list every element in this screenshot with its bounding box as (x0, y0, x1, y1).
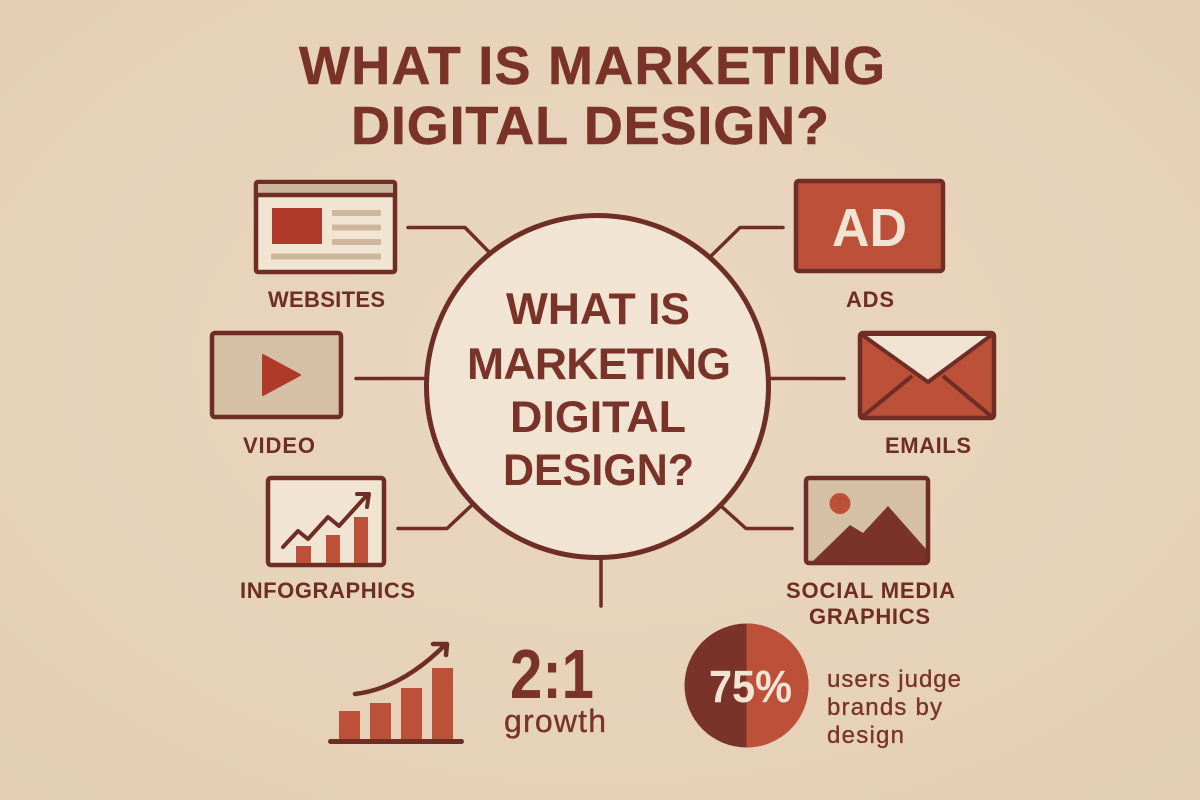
75% stat (684, 624, 961, 749)
central circle: DIGITAL (510, 393, 686, 442)
icon: ad banner: AD (832, 198, 907, 258)
label: WEBSITES (268, 287, 385, 312)
video item (212, 333, 341, 458)
icon: image (806, 478, 928, 563)
central circle: WHAT IS (506, 285, 690, 334)
central circle: DESIGN? (503, 446, 694, 495)
stat value: 2:1 (510, 635, 594, 713)
icon: envelope (860, 333, 994, 418)
icon: video player (212, 333, 341, 417)
label (786, 578, 955, 629)
title: DIGITAL DESIGN? (351, 96, 829, 156)
growth stat (328, 635, 606, 744)
social media graphics item (786, 478, 955, 629)
label: GRAPHICS (809, 604, 930, 629)
title: WHAT IS MARKETING (299, 36, 885, 96)
icon: browser window (256, 182, 395, 272)
stat description: users judge (827, 666, 961, 693)
emails item (860, 333, 994, 458)
pie chart (684, 624, 808, 748)
ads item (796, 181, 943, 312)
label: EMAILS (885, 433, 971, 458)
infographics item (240, 478, 415, 603)
websites item (256, 182, 395, 312)
central circle: MARKETING (467, 340, 731, 389)
icon: chart panel (268, 478, 384, 565)
central circle (426, 216, 768, 558)
stat description (827, 666, 961, 749)
label: VIDEO (243, 433, 315, 458)
icon: growth bars (328, 644, 464, 744)
stat label: growth (504, 703, 606, 739)
title (299, 36, 885, 156)
label: INFOGRAPHICS (240, 578, 415, 603)
stat description: brands by (827, 694, 942, 721)
connector lines (356, 228, 844, 606)
pie chart: 75% (709, 661, 792, 712)
icon: ad banner (796, 181, 943, 271)
stat description: design (827, 722, 904, 749)
label: SOCIAL MEDIA (786, 578, 955, 603)
label: ADS (846, 287, 894, 312)
